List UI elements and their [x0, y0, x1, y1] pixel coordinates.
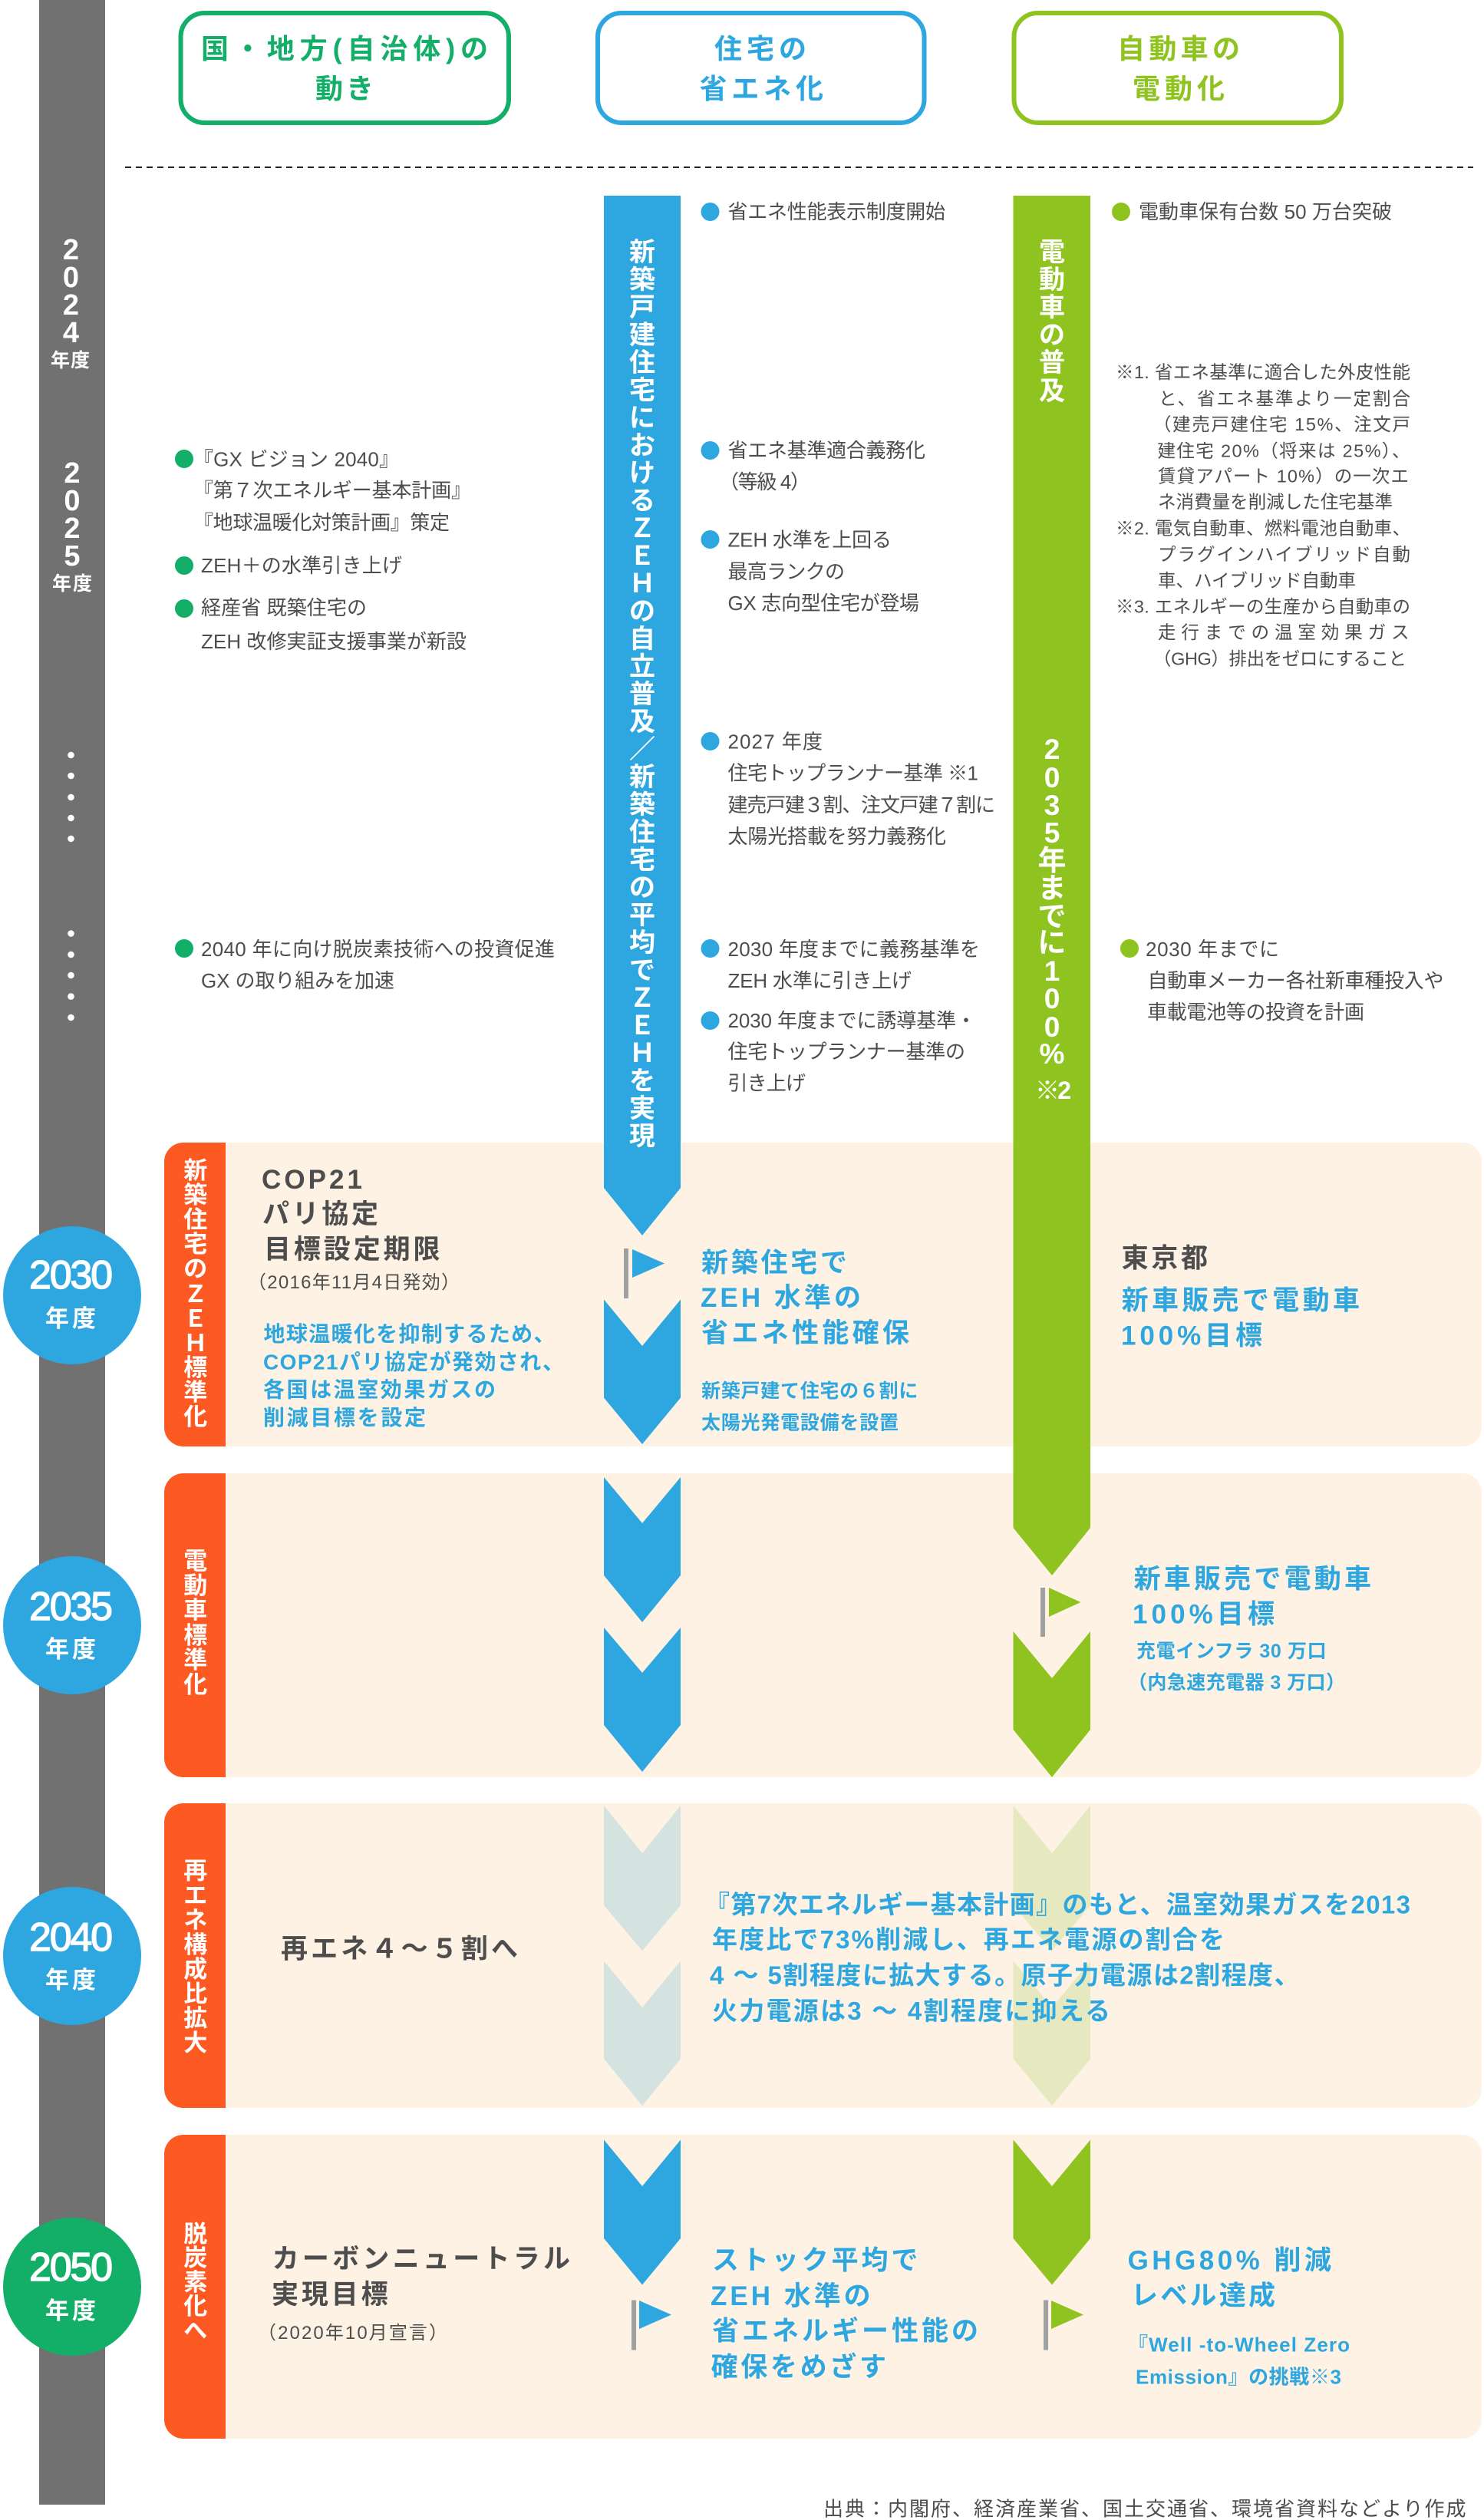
text block: EV 2030 automakers	[1120, 938, 1444, 1024]
text block: housing GX type: GX 志向型住宅が登場	[727, 592, 919, 615]
timeline bar	[39, 0, 105, 2505]
text block: EV 2035 goal: （内急速充電器 3 万口）	[1128, 1672, 1345, 1694]
text block: seventh energy plan: 火力電源は3 ～ 4割程度に抑える	[712, 1997, 1110, 2025]
header: housing energy saving: 省エネ化	[700, 73, 823, 104]
icon: flag EV 2050	[1044, 2301, 1083, 2350]
timeline dots: first group	[68, 752, 74, 842]
text block: EV 500k: 電動車保有台数 50 万台突破	[1139, 200, 1392, 223]
text block: government 2025 items	[175, 448, 471, 653]
text block: COP21 Paris Agreement: （2016年11月4日発効）	[248, 1272, 460, 1293]
header: vehicle electrification: 自動車の	[1117, 33, 1240, 64]
text block: housing 2027 top runner: 2027 年度	[727, 731, 823, 754]
text block: housing 2030 guidance: 2030 年度までに誘導基準・	[727, 1009, 976, 1032]
footnotes: ネ消費量を削減した住宅基準	[1158, 492, 1393, 512]
chevron: housing 2035 lower	[604, 1628, 681, 1772]
text block: housing 2030 goal	[701, 1248, 918, 1433]
text block: housing GX type: ZEH 水準を上回る	[727, 528, 892, 551]
footnotes	[1116, 362, 1410, 669]
text block: EV 2030 automakers: 自動車メーカー各社新車種投入や	[1148, 969, 1444, 992]
source note: 出典：内閣府、経済産業省、国土交通省、環境省資料などより作成	[823, 2497, 1466, 2520]
text block: COP21 Paris Agreement: 削減目標を設定	[263, 1406, 426, 1430]
circle: 2040: 年度	[45, 1967, 96, 1994]
header: housing energy saving	[598, 13, 924, 123]
year label: 2024	[51, 234, 90, 371]
panel: 2040 renewable share: 再エネ構成比拡大	[183, 1857, 207, 2057]
text block: housing 2027 top runner	[701, 731, 995, 848]
text block: EV 2035 goal: 新車販売で電動車	[1134, 1564, 1371, 1595]
arrow: housing ZEH bar	[604, 196, 681, 1235]
panel: 2030 new housing ZEH standard: 新築住宅のＺＥＨ標準化	[183, 1157, 207, 1430]
text block: government 2025 items: ZEH 改修実証支援事業が新設	[201, 630, 467, 653]
text block: government 2040 investment	[175, 938, 555, 992]
text block: housing 2027 top runner: 太陽光搭載を努力義務化	[727, 825, 946, 848]
text block: carbon neutral goal: カーボンニュートラル	[272, 2244, 570, 2274]
circle: 2035: 年度	[45, 1636, 96, 1663]
text block: housing 2030 goal: 新築住宅で	[701, 1248, 847, 1278]
text block: government 2025 items: 経産省 既築住宅の	[201, 596, 367, 619]
footnotes: と、省エネ基準より一定割合	[1159, 388, 1410, 408]
text block: government 2040 investment: 2040 年に向け脱炭素技術への投資促進	[201, 938, 555, 961]
chevron: EV 2035	[1013, 1631, 1090, 1777]
icon: flag housing 2050	[632, 2301, 671, 2350]
circle: 2030: 年度	[45, 1305, 96, 1332]
footnotes: 賃貸アパート 10%）の一次エ	[1158, 467, 1409, 487]
arrow: EV adoption bar: ※2	[1035, 1077, 1071, 1104]
header: vehicle electrification: 電動化	[1133, 73, 1225, 104]
text block: housing 2027 top runner: 建売戸建３割、注文戸建７割に	[727, 793, 995, 816]
header: vehicle electrification	[1014, 13, 1341, 123]
text block: carbon neutral goal	[258, 2244, 570, 2344]
text block: carbon neutral goal: 実現目標	[272, 2280, 388, 2310]
panel: 2050 decarbonization: 脱炭素化へ	[183, 2221, 207, 2344]
text block: carbon neutral goal: （2020年10月宣言）	[258, 2323, 447, 2344]
text block: COP21 Paris Agreement: 目標設定期限	[264, 1235, 440, 1265]
text block: housing 2030 guidance	[701, 1009, 976, 1094]
header: national and local government	[181, 13, 509, 123]
circle: 2030	[3, 1226, 141, 1364]
text block: housing 2030 mandatory	[701, 938, 980, 992]
text block: government 2025 items: ZEH＋の水準引き上げ	[201, 554, 402, 577]
footnotes: プラグインハイブリッド自動	[1158, 545, 1410, 565]
text block: housing 2050 goal: ストック平均で	[712, 2245, 918, 2276]
header: housing energy saving: 住宅の	[714, 33, 806, 64]
text block: seventh energy plan: 4 ～ 5割程度に拡大する。原子力電源は2割程度、	[710, 1961, 1300, 1989]
chevron: housing 2050	[604, 2139, 681, 2285]
text block: COP21 Paris Agreement	[248, 1165, 564, 1430]
chevron: EV 2040 upper	[1013, 1806, 1090, 1951]
header: national and local government: 国・地方(自治体)の	[201, 33, 488, 64]
panel: 2050 decarbonization	[164, 2135, 1482, 2439]
arrow: EV adoption bar: 電動車の普及	[1039, 238, 1065, 406]
text block: EV 2050 goal: 『Well -to-Wheel Zero	[1128, 2333, 1350, 2356]
year label: 2025: 2025	[64, 457, 81, 572]
text block: government 2025 items: 『第７次エネルギー基本計画』	[193, 479, 471, 502]
text block: government 2025 items: 『地球温暖化対策計画』策定	[193, 511, 450, 534]
text block: seventh energy plan	[704, 1891, 1410, 2025]
chevron: EV 2050	[1013, 2139, 1090, 2285]
circle: 2050: 年度	[45, 2297, 96, 2324]
text block: Tokyo 2030 goal: 新車販売で電動車	[1122, 1286, 1360, 1315]
year label: 2025: 年度	[52, 573, 92, 595]
circle: 2035: 2035	[29, 1585, 113, 1629]
text block: COP21 Paris Agreement: 地球温暖化を抑制するため、	[264, 1322, 556, 1346]
text block: EV 2030 automakers: 2030 年までに	[1146, 938, 1279, 961]
text block: seventh energy plan: 年度比で73%削減し、再エネ電源の割合を	[712, 1925, 1225, 1954]
text block: housing GX type	[701, 528, 919, 615]
circle: 2050: 2050	[29, 2245, 113, 2290]
text block: Tokyo 2030 goal	[1121, 1243, 1360, 1351]
text block: housing 2050 goal	[711, 2245, 978, 2382]
text block: renewables 40-50%: 再エネ４～５割へ	[281, 1934, 518, 1964]
text block: housing 2030 mandatory: 2030 年度までに義務基準を	[727, 938, 980, 961]
text block: housing mandatory standard	[701, 439, 925, 493]
text block: COP21 Paris Agreement: COP21パリ協定が発効され、	[263, 1349, 564, 1374]
panel: 2040 renewable share	[164, 1803, 1482, 2108]
circle: 2035	[3, 1556, 141, 1694]
circle: 2040: 2040	[29, 1915, 113, 1960]
text block: housing 2030 mandatory: ZEH 水準に引き上げ	[727, 969, 912, 992]
text block: housing mandatory standard: （等級 4）	[719, 470, 810, 493]
text block: housing 2050 goal: 省エネルギー性能の	[712, 2316, 978, 2347]
text block: housing GX type: 最高ランクの	[727, 560, 845, 583]
year label: 2025	[52, 457, 92, 595]
footnotes: （GHG）排出をゼロにすること	[1153, 649, 1407, 669]
text block: COP21 Paris Agreement: パリ協定	[262, 1199, 378, 1229]
text block: EV 2050 goal: GHG80% 削減	[1128, 2245, 1331, 2276]
panel: 2035 EV standard: 電動車標準化	[183, 1548, 207, 1698]
header: national and local government: 動き	[315, 73, 374, 104]
circle: 2050	[3, 2218, 141, 2356]
text block: Tokyo 2030 goal: 東京都	[1122, 1243, 1208, 1274]
text block: Tokyo 2030 goal: 100%目標	[1121, 1321, 1262, 1351]
year label: 2024: 年度	[51, 350, 90, 371]
chevron: EV 2040 lower	[1013, 1961, 1090, 2106]
text block: housing 2030 goal: ZEH 水準の	[701, 1283, 861, 1313]
footnotes: 走行までの温室効果ガス	[1158, 622, 1409, 642]
text block: housing 2030 guidance: 引き上げ	[727, 1071, 806, 1094]
chevron: housing 2040 lower	[604, 1961, 681, 2106]
text block: EV 2030 automakers: 車載電池等の投資を計画	[1147, 1001, 1364, 1024]
panel: 2030 new housing ZEH standard	[164, 1143, 1482, 1446]
text block: EV 2035 goal: 100%目標	[1133, 1599, 1275, 1630]
text block: housing 2030 goal: 新築戸建て住宅の６割に	[701, 1380, 918, 1402]
text block: housing 2050 goal: ZEH 水準の	[711, 2281, 871, 2311]
timeline dots: second group	[68, 930, 74, 1021]
chevron: housing 2035 upper	[604, 1477, 681, 1622]
text block: EV 2035 goal: 充電インフラ 30 万口	[1136, 1641, 1327, 1662]
text block: government 2040 investment: GX の取り組みを加速	[201, 969, 394, 992]
icon: flag EV 2035	[1040, 1588, 1080, 1637]
arrow: EV adoption bar: 2035年までに100%	[1037, 734, 1067, 1070]
year label: 2024: 2024	[63, 234, 79, 349]
chevron: housing 2040 upper	[604, 1806, 681, 1951]
icon: flag housing 2030	[624, 1248, 665, 1298]
text block: seventh energy plan: 『第7次エネルギー基本計画』のもと、温室効果ガスを2013	[704, 1891, 1410, 1918]
text block: housing 2030 goal: 太陽光発電設備を設置	[701, 1412, 899, 1433]
footnotes: ※3. エネルギーの生産から自動車の	[1116, 597, 1410, 617]
text block: EV 2035 goal	[1128, 1564, 1371, 1694]
text block: housing mandatory standard: 省エネ基準適合義務化	[727, 439, 925, 462]
text block: housing 2050 goal: 確保をめざす	[711, 2351, 886, 2382]
text block: EV 2050 goal	[1128, 2245, 1350, 2388]
panel: 2035 EV standard	[164, 1473, 1482, 1777]
text block: housing 2027 top runner: 住宅トップランナー基準 ※1	[727, 761, 978, 784]
text block: government 2025 items: 『GX ビジョン 2040』	[193, 448, 399, 471]
arrow: housing ZEH bar: 新築戸建住宅におけるＺＥＨの自立普及／新築住宅の平均でＺＥＨを実現	[629, 238, 655, 1151]
circle: 2040	[3, 1887, 141, 2025]
footnotes: 建住宅 20%（将来は 25%）、	[1157, 440, 1410, 460]
footnotes: （建売戸建住宅 15%、注文戸	[1153, 414, 1410, 434]
arrow: EV adoption bar	[1013, 196, 1090, 1575]
circle: 2030: 2030	[29, 1253, 113, 1298]
text block: housing labeling: 省エネ性能表示制度開始	[727, 200, 945, 223]
footnotes: ※1. 省エネ基準に適合した外皮性能	[1116, 362, 1410, 382]
text block: housing 2030 goal: 省エネ性能確保	[701, 1318, 909, 1348]
text block: housing 2030 guidance: 住宅トップランナー基準の	[727, 1041, 965, 1064]
chevrons: housing 2030	[604, 1300, 681, 1444]
footnotes: 車、ハイブリッド自動車	[1158, 571, 1356, 591]
text block: EV 2050 goal: Emission』の挑戦※3	[1136, 2365, 1341, 2388]
text block: COP21 Paris Agreement: COP21	[262, 1165, 362, 1195]
footnotes: ※2. 電気自動車、燃料電池自動車、	[1116, 519, 1410, 539]
text block: EV 2050 goal: レベル達成	[1131, 2281, 1275, 2311]
text block: COP21 Paris Agreement: 各国は温室効果ガスの	[263, 1378, 496, 1401]
